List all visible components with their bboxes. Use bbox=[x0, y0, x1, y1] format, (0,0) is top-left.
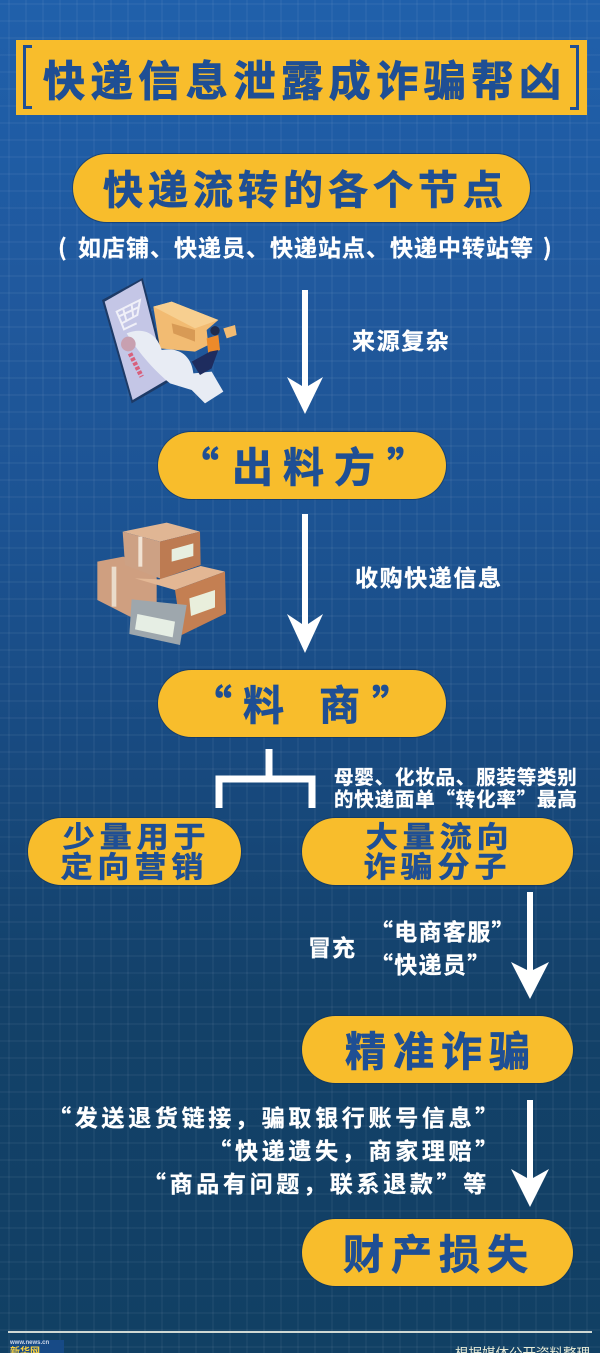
pill: broker bbox=[158, 670, 446, 737]
pill: financial loss: 财产损失 bbox=[343, 1221, 535, 1281]
label: impersonated roles: “电商客服” bbox=[370, 913, 516, 947]
pill: broker: ” bbox=[372, 672, 413, 732]
scam scripts bbox=[48, 1099, 502, 1199]
pill: supplier: 方 bbox=[334, 434, 375, 494]
label: buys express info: 收购快递信息 bbox=[355, 559, 503, 593]
subtitle: node examples: ( bbox=[58, 229, 68, 263]
pill: supplier: “ bbox=[178, 434, 219, 494]
pill: supplier: 料 bbox=[283, 434, 324, 494]
scam scripts: “快递遗失，商家理赔” bbox=[208, 1132, 502, 1166]
pill: broker: “ bbox=[191, 672, 232, 732]
arrow: to financial loss bbox=[511, 1100, 549, 1207]
label: complex sources: 来源复杂 bbox=[352, 322, 450, 356]
label: impersonated roles: “快递员” bbox=[370, 946, 492, 980]
icon: stacked parcels bbox=[97, 522, 226, 645]
pill: flows to scammers: 诈骗分子 bbox=[364, 844, 511, 886]
note: highest conversion categories: 母婴、化妆品、服装等类别 bbox=[334, 761, 578, 790]
pill: targeted marketing bbox=[28, 818, 241, 885]
arrow: source to supplier bbox=[287, 290, 323, 414]
footer rule bbox=[8, 1331, 592, 1333]
pill: supplier bbox=[158, 432, 446, 499]
note: highest conversion categories bbox=[334, 761, 578, 812]
pill: targeted marketing: 少量用于 bbox=[63, 814, 211, 856]
icon: phone, parcel and courier bbox=[102, 278, 237, 404]
pill: supplier: 出 bbox=[232, 434, 273, 494]
pill: broker: 商 bbox=[319, 672, 360, 732]
pill: flows to scammers bbox=[302, 818, 573, 885]
scam scripts: “商品有问题，联系退款”等 bbox=[143, 1165, 490, 1199]
label: impersonate: 冒充 bbox=[308, 929, 356, 963]
pill: flows to scammers: 大量流向 bbox=[366, 814, 514, 856]
pill: supplier: ” bbox=[387, 434, 428, 494]
pill: precise scam bbox=[302, 1016, 573, 1083]
logo: source mark bbox=[10, 1340, 64, 1353]
label: impersonated roles bbox=[370, 913, 516, 980]
subtitle: node examples: ) bbox=[543, 229, 553, 263]
pill: broker: 料 bbox=[243, 672, 284, 732]
pill: express nodes: 快递流转的各个节点 bbox=[103, 158, 508, 216]
arrow: to precise scam bbox=[511, 892, 549, 999]
left bracket bbox=[23, 45, 32, 109]
subtitle: node examples: 如店铺、快递员、快递站点、快递中转站等 bbox=[78, 229, 534, 263]
pill: precise scam: 精准诈骗 bbox=[345, 1018, 537, 1078]
pill: financial loss bbox=[302, 1219, 573, 1286]
title banner bbox=[16, 40, 587, 115]
arrow: supplier to broker bbox=[287, 514, 323, 653]
scam scripts: “发送退货链接，骗取银行账号信息” bbox=[48, 1099, 502, 1133]
bracket connector bbox=[216, 749, 316, 808]
right bracket bbox=[570, 45, 579, 110]
pill: targeted marketing: 定向营销 bbox=[61, 844, 208, 886]
note: highest conversion categories: 的快递面单“转化率”最高 bbox=[334, 783, 578, 812]
logo: source mark: www.news.cn bbox=[10, 1340, 49, 1346]
title text: 快递信息泄露成诈骗帮凶 bbox=[43, 48, 567, 109]
